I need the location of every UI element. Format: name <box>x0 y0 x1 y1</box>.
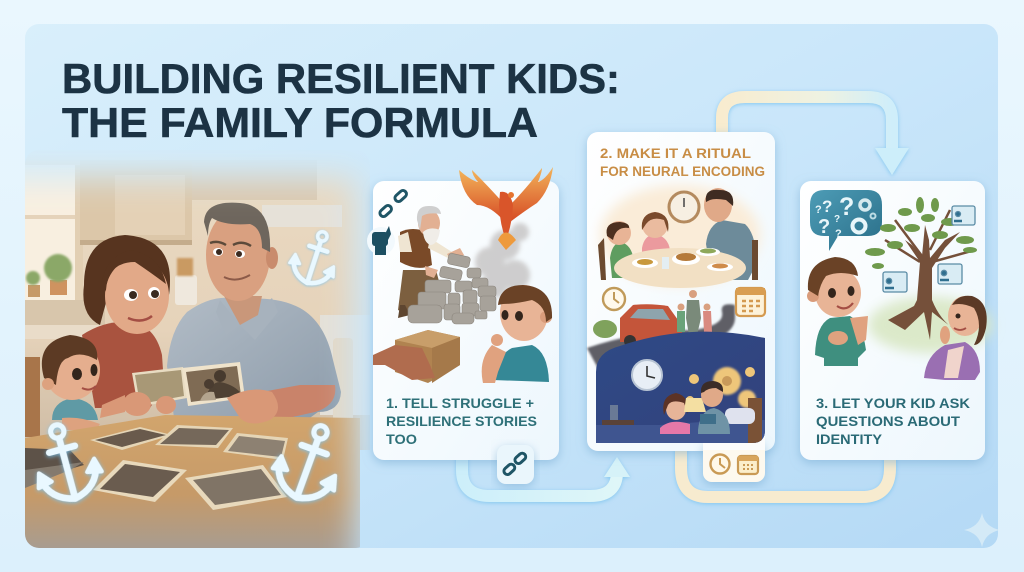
chairs <box>25 338 353 437</box>
wall clock <box>669 192 699 222</box>
speech bubble with questions and gears: ? <box>835 228 842 240</box>
card 1 text <box>386 395 537 447</box>
plates of food <box>632 248 733 271</box>
icon: sparkle <box>964 513 1000 547</box>
father reading <box>698 381 730 434</box>
girl in bed <box>660 393 690 434</box>
glowing gears <box>686 367 756 408</box>
card 3 text: 3. LET YOUR KID ASK <box>816 395 970 411</box>
child <box>42 335 100 430</box>
family walking <box>677 290 712 335</box>
nightstand <box>602 420 634 425</box>
panel: family photo scene <box>25 150 370 548</box>
tab: fist <box>367 227 395 255</box>
tree <box>865 197 977 340</box>
title line 1: BUILDING RESILIENT KIDS: <box>62 55 620 102</box>
thinking boy <box>482 285 552 383</box>
icon: broken chain top <box>379 189 408 218</box>
card 3 text: IDENTITY <box>816 431 883 447</box>
arrow: card 2 to card 3 <box>681 445 890 497</box>
panel: card 1 struggle stories <box>367 167 559 484</box>
card 2 heading: FOR NEURAL ENCODING <box>600 164 765 179</box>
dining table <box>614 248 746 288</box>
icon: id badges <box>883 206 975 292</box>
kitchen background <box>25 150 370 450</box>
old man building wall <box>398 206 464 318</box>
card 3 text <box>816 395 970 447</box>
photographs on table <box>25 425 288 510</box>
photographs held <box>132 362 245 407</box>
stone wall <box>408 253 496 324</box>
tab: clock and calendar <box>703 436 765 482</box>
road scene <box>587 288 765 372</box>
icon: broken chain bottom <box>503 452 527 476</box>
card 1 text: 1. TELL STRUGGLE + <box>386 395 534 411</box>
arrow: card 1 to card 2 <box>462 455 630 496</box>
card 2 heading <box>600 146 765 179</box>
title <box>62 55 620 146</box>
icon: clock <box>603 288 625 310</box>
icon: anchor bottom left <box>24 417 107 507</box>
bed <box>596 420 765 443</box>
car <box>620 304 682 347</box>
boy <box>807 257 868 366</box>
hands <box>100 390 278 424</box>
speech bubble with questions and gears: ? <box>818 216 830 238</box>
mother <box>924 296 987 380</box>
icon: phoenix <box>459 167 553 250</box>
speech bubble with questions and gears: ? <box>822 197 832 216</box>
icon: anchor top right <box>285 225 346 290</box>
clock on wall <box>632 360 662 390</box>
lamp <box>684 398 706 412</box>
icon: calendar <box>736 288 765 316</box>
father at table <box>704 188 758 280</box>
title line 2: THE FAMILY FORMULA <box>62 99 538 146</box>
card 2 heading: 2. MAKE IT A RITUAL <box>600 146 751 161</box>
mother <box>82 235 170 408</box>
icon: fist <box>372 226 391 255</box>
ground <box>868 297 992 353</box>
speech bubble with questions and gears: ? <box>815 204 822 216</box>
card 1 text: RESILIENCE STORIES <box>386 413 537 429</box>
card 3 background <box>800 181 985 460</box>
cardboard box and hand <box>373 330 460 383</box>
night bedroom scene <box>596 332 765 443</box>
card 1 background <box>373 181 559 460</box>
card 2 background <box>587 132 775 451</box>
icon: anchor bottom right <box>266 415 353 509</box>
father <box>167 203 341 425</box>
speech bubble with questions and gears <box>810 190 882 251</box>
boy at table <box>598 221 634 280</box>
card 1 text: TOO <box>386 431 417 447</box>
girl at table <box>642 212 670 256</box>
speech bubble with questions and gears: ? <box>834 214 840 225</box>
arrow: loop over to card 3 <box>722 97 909 175</box>
smoke <box>475 223 530 298</box>
card 3 text: QUESTIONS ABOUT <box>816 413 960 429</box>
speech bubble with questions and gears: ? <box>839 193 854 221</box>
panel: card 3 identity <box>800 181 992 460</box>
table <box>25 415 360 548</box>
tab: broken chain <box>497 445 534 484</box>
panel: card 2 ritual <box>587 132 775 482</box>
dinner scene <box>598 185 760 288</box>
